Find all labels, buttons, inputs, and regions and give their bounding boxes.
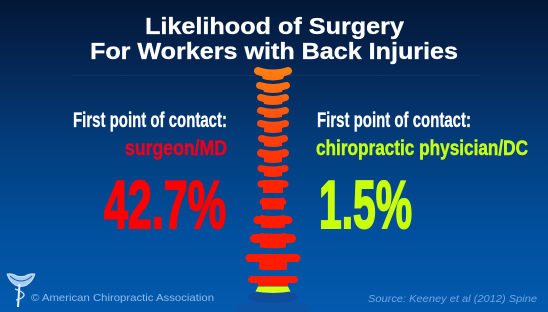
source text: Source: Keeney et al (2012) Spine [368, 293, 537, 305]
vertebra 2 [260, 86, 286, 93]
left column [73, 109, 227, 243]
spine illustration [246, 71, 300, 286]
yellow base vertebra [256, 286, 290, 293]
right value: 1.5% [319, 167, 412, 243]
icon: caduceus logo [7, 274, 35, 307]
vertebra 3 [260, 98, 286, 105]
vertebra 6 [262, 138, 284, 147]
vertebra 11 [254, 215, 292, 228]
left sublabel: surgeon/MD [125, 137, 227, 160]
left label: First point of contact: [73, 109, 227, 132]
right column [316, 109, 528, 243]
title: For Workers with Back Injuries [90, 38, 458, 64]
vertebra 14 [248, 276, 298, 286]
vertebra 9 [258, 180, 288, 193]
vertebra 12 [250, 233, 296, 248]
vertebra 5 [260, 124, 286, 133]
left value: 42.7% [104, 167, 226, 243]
right label: First point of contact: [317, 109, 471, 132]
vertebra 10 [260, 198, 286, 210]
vertebra 7 [261, 153, 285, 163]
title [90, 13, 458, 64]
vertebra 4 [260, 110, 286, 118]
title: Likelihood of Surgery [145, 13, 404, 39]
spine base shadow [234, 291, 312, 312]
copyright text: © American Chiropractic Association [31, 292, 214, 304]
vertebra 1 [258, 71, 288, 80]
vertebra 8 [261, 168, 285, 177]
vertebra 13 [246, 254, 300, 270]
